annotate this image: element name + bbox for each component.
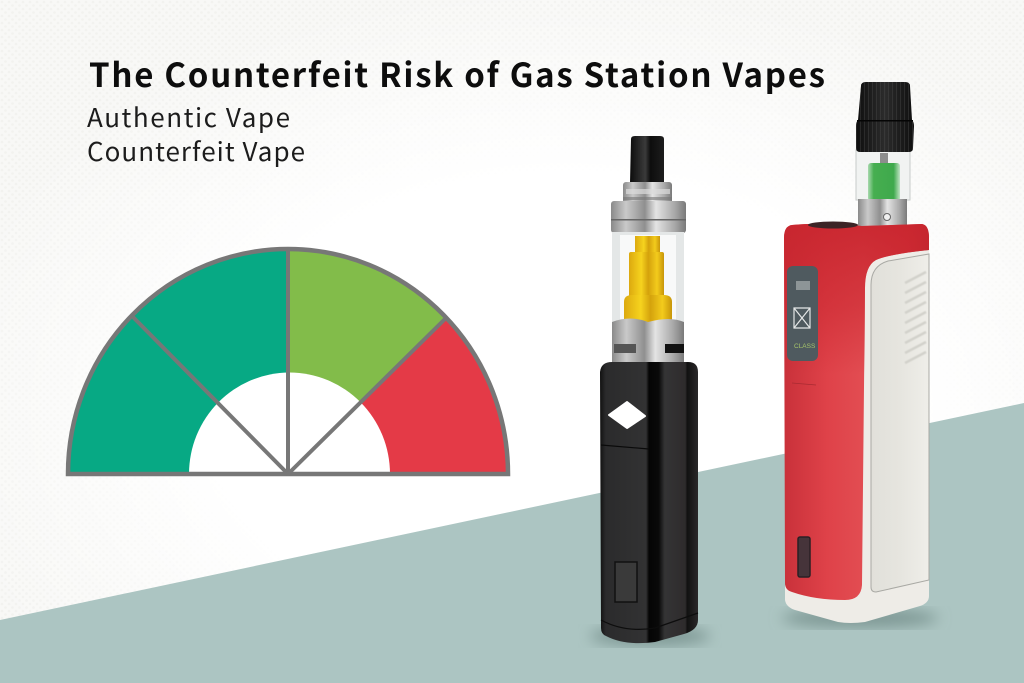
legend label: counterfeit: Counterfeit Vape bbox=[87, 132, 305, 169]
teal floor band bbox=[0, 403, 1024, 683]
legend label: authentic: Authentic Vape bbox=[87, 98, 290, 135]
gauge segment: teal left bbox=[68, 317, 288, 474]
metal collar bbox=[858, 199, 907, 226]
gauge chart bbox=[68, 249, 508, 474]
gauge segment: red bbox=[288, 319, 508, 474]
diagonal grille bbox=[905, 272, 926, 363]
battery body bbox=[600, 362, 698, 643]
green liquid bbox=[868, 163, 900, 201]
drip tip bbox=[630, 136, 664, 183]
knurled ring bbox=[623, 182, 672, 205]
glass tank bbox=[612, 232, 684, 322]
gauge segment: teal top bbox=[133, 249, 288, 474]
ribbed cap bbox=[856, 82, 914, 152]
top vent opening bbox=[808, 222, 858, 228]
white base and side body bbox=[785, 250, 929, 623]
air slots bbox=[614, 344, 636, 353]
counterfeit vape: red device bbox=[782, 82, 938, 628]
glass chamber bbox=[856, 150, 910, 200]
red body bbox=[784, 224, 929, 600]
body seam bbox=[792, 383, 816, 385]
white diamond logo bbox=[609, 402, 645, 428]
device shadow bbox=[590, 626, 710, 646]
grille button bbox=[615, 562, 637, 602]
red upper shade bbox=[784, 224, 929, 600]
gold coil bbox=[624, 236, 672, 322]
lower steel base bbox=[612, 318, 684, 364]
body seam bbox=[601, 445, 649, 449]
title: The Counterfeit Risk of Gas Station Vapes bbox=[89, 49, 825, 97]
display screen bbox=[787, 266, 818, 361]
upper collar bbox=[611, 201, 686, 233]
inset grey panel bbox=[871, 254, 929, 592]
legend text bbox=[87, 98, 305, 169]
gauge inner white semicircle bbox=[189, 373, 390, 474]
display X box bbox=[794, 308, 810, 328]
gauge segment: green bbox=[288, 249, 445, 474]
authentic vape: black device bbox=[590, 136, 710, 646]
display readout: CLASS bbox=[794, 343, 816, 350]
gauge outline and spokes bbox=[68, 249, 508, 474]
display battery glyph bbox=[796, 281, 810, 290]
device shadow bbox=[782, 608, 938, 628]
USB port bbox=[798, 537, 810, 577]
